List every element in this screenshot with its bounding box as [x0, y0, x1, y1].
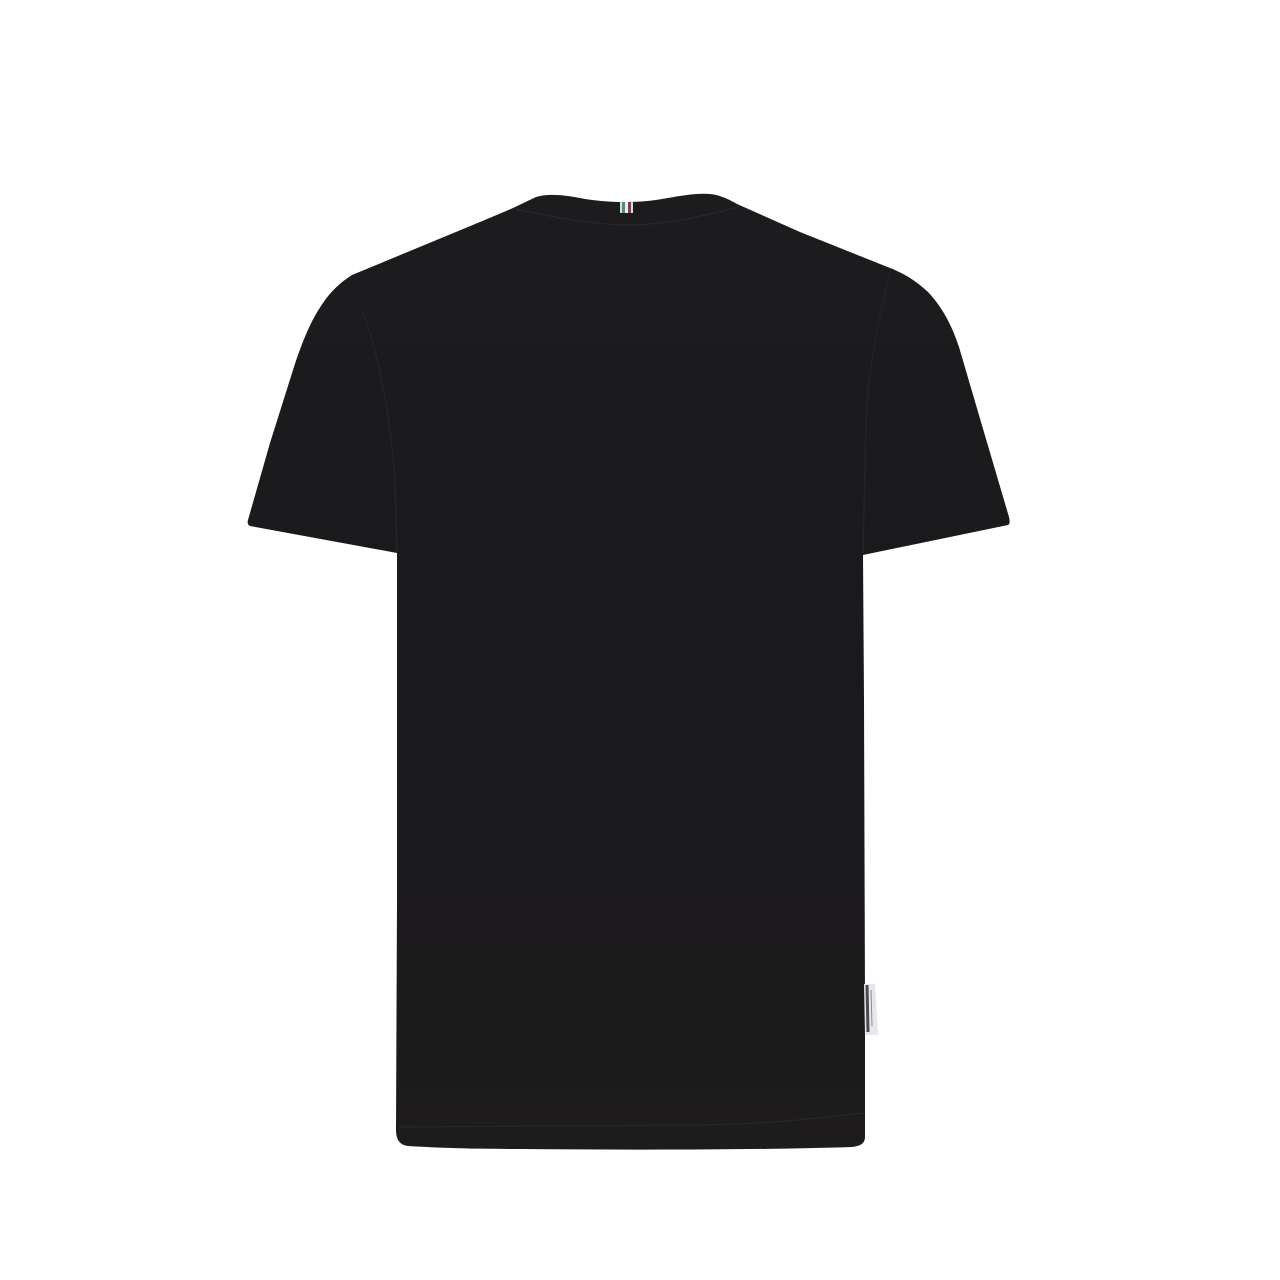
t-shirt — [248, 194, 1010, 1150]
hem stitching — [398, 1113, 864, 1127]
right sleeve seam — [863, 273, 890, 553]
neck tricolour tab — [620, 202, 633, 213]
side hem label — [864, 984, 878, 1035]
collar stitching — [515, 207, 738, 225]
left sleeve seam — [362, 310, 397, 553]
shirt body and sleeves — [248, 194, 1010, 1150]
